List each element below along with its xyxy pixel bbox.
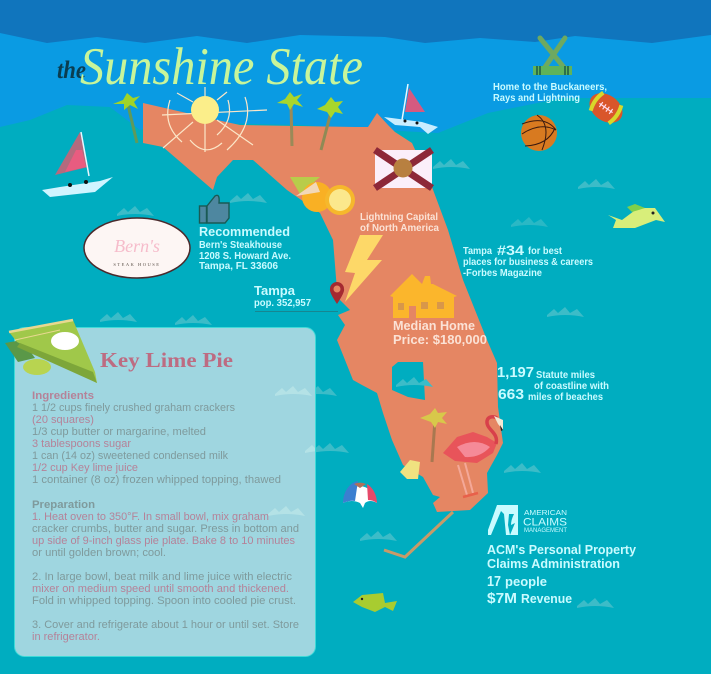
logo: Bern's Steak House: STEAK HOUSE <box>113 262 161 267</box>
text: recommended: Bern's Steakhouse <box>199 240 282 251</box>
text: home teams: Home to the Buckaneers, <box>493 82 607 93</box>
text: ACM stats: $7M <box>487 590 517 607</box>
text: recommended: Tampa, FL 33606 <box>199 261 278 272</box>
text: preparation: up side of 9-inch glass pie plate. Bake 8 to 10 minutes <box>32 535 295 547</box>
text: median home price: Price: $180,000 <box>393 333 487 347</box>
logo: American Claims Management: MANAGEMENT <box>524 528 567 534</box>
text: preparation: mixer on medium speed until smooth and thickened. <box>32 583 289 595</box>
text: ingredients: 1/3 cup butter or margarine, melted <box>32 426 206 438</box>
icon: sun <box>162 87 267 152</box>
text: Tampa ranking: places for business & careers <box>463 257 593 268</box>
text: ACM stats <box>487 543 636 607</box>
text: preparation: cracker crumbs, butter and sugar. Press in bottom and <box>32 523 299 535</box>
text: median home price <box>393 319 487 347</box>
logo: American Claims Management: CLAIMS <box>523 516 567 528</box>
icon: lightning bolt <box>345 235 383 302</box>
icon: house <box>390 274 457 318</box>
text: coastline stats: miles of beaches <box>528 392 603 403</box>
text: ingredients: 1 can (14 oz) sweetened condensed milk <box>32 450 228 462</box>
logo: Bern's Steak House: Bern's <box>114 236 160 256</box>
text: Tampa ranking: #34 <box>497 242 524 258</box>
text: ingredients: 1 1/2 cups finely crushed graham crackers <box>32 402 235 414</box>
icon: citrus fruit <box>290 177 355 215</box>
text: recommended: 1208 S. Howard Ave. <box>199 251 291 262</box>
waves over panel <box>268 386 315 516</box>
icon: palm tree centre <box>277 92 303 146</box>
text: median home price: Median Home <box>393 319 475 333</box>
text: ingredients: 3 tablespoons sugar <box>32 438 131 450</box>
icon: beach ball <box>343 481 377 508</box>
text: preparation <box>32 499 299 643</box>
text: preparation: 1. Heat oven to 350°F. In small bowl, mix graham <box>32 511 269 523</box>
text: lightning capital: of North America <box>360 223 439 234</box>
text: ACM stats: ACM's Personal Property <box>487 543 636 557</box>
title: Sunshine State <box>80 38 363 96</box>
text: coastline stats: Statute miles <box>536 370 595 381</box>
text: ingredients <box>32 390 281 486</box>
text: coastline stats <box>497 364 609 403</box>
icon: Florida flag <box>375 150 432 188</box>
icon: green fish <box>353 593 397 612</box>
text: ingredients: (20 squares) <box>32 414 94 426</box>
text: recommended: Recommended <box>199 225 290 239</box>
heading: Key Lime Pie: Key Lime Pie <box>100 348 233 372</box>
icon: sailboat right <box>384 84 438 134</box>
logo: Bern's Steak House <box>84 218 190 278</box>
text: coastline stats: of coastline with <box>534 381 609 392</box>
text: ACM stats: Revenue <box>521 592 572 606</box>
text: ingredients: 1 container (8 oz) frozen whipped topping, thawed <box>32 474 281 486</box>
icon: palm tree right <box>317 97 343 150</box>
logo: American Claims Management: AMERICAN <box>524 510 567 517</box>
text: preparation: 2. In large bowl, beat milk and lime juice with electric <box>32 571 293 583</box>
icon: crossed hockey sticks <box>533 38 572 75</box>
icon: key lime pie slice <box>5 320 97 383</box>
text: home teams: Rays and Lightning <box>493 93 580 104</box>
icon: yellow fish <box>608 204 665 228</box>
icon: map pin <box>330 282 344 304</box>
text: Tampa population: pop. 352,957 <box>254 298 311 309</box>
icon: palm tree south <box>420 408 447 462</box>
map of Florida <box>143 103 503 557</box>
text: Tampa ranking: -Forbes Magazine <box>463 268 542 279</box>
title: the <box>57 57 86 84</box>
icon: basketball <box>521 115 557 151</box>
text: preparation: in refrigerator. <box>32 631 100 643</box>
icon: football <box>584 87 628 129</box>
text: Tampa ranking: for best <box>528 246 563 257</box>
text: preparation: Fold in whipped topping. Spoon into cooled pie crust. <box>32 595 296 607</box>
text: Tampa ranking: Tampa <box>463 246 492 257</box>
text: ACM stats: people <box>505 575 547 589</box>
icon: seashell <box>400 460 420 479</box>
text: Tampa population: Tampa <box>254 284 296 298</box>
text: lightning capital: Lightning Capital <box>360 212 438 223</box>
text: preparation: Preparation <box>32 499 95 511</box>
text: Tampa population <box>254 284 338 312</box>
text: preparation: 3. Cover and refrigerate about 1 hour or until set. Store <box>32 619 299 631</box>
text: ACM stats: Claims Administration <box>487 557 620 571</box>
text: Tampa ranking <box>463 242 593 279</box>
text: ingredients: Ingredients <box>32 390 94 402</box>
text: lightning capital <box>360 212 439 234</box>
panel: key lime pie recipe <box>5 320 342 656</box>
wave marks <box>100 159 615 608</box>
text: home teams <box>493 82 607 104</box>
text: coastline stats: 663 <box>498 386 524 403</box>
text: ingredients: 1/2 cup Key lime juice <box>32 462 138 474</box>
icon: flamingo <box>443 416 503 497</box>
text: ACM stats: 17 <box>487 573 501 590</box>
text: recommended <box>199 225 291 272</box>
icon: thumbs up <box>200 195 229 223</box>
icon: sailboat left <box>42 132 113 197</box>
text: preparation: or until golden brown; cool. <box>32 547 166 559</box>
logo: American Claims Management <box>488 505 567 535</box>
icon: palm tree left <box>113 93 140 143</box>
text: coastline stats: 1,197 <box>497 364 534 381</box>
